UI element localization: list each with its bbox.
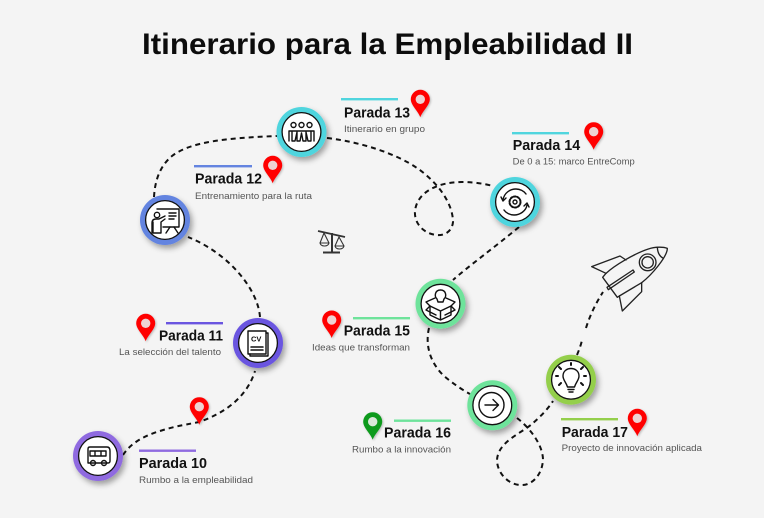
stop: Parada 15: [312, 279, 466, 352]
stop: Parada 11: [119, 314, 283, 368]
title: Itinerario para la Empleabilidad II: [142, 28, 633, 61]
stop: Parada 10: Rumbo a la empleabilidad: [139, 475, 253, 485]
stop: Parada 12: Entrenamiento para la ruta: [195, 191, 313, 201]
stop: Parada 11: La selección del talento: [119, 347, 221, 357]
stop: Parada 15: Ideas que transforman: [312, 342, 410, 352]
stop: Parada 10: Parada 10: [139, 456, 207, 472]
stop: Parada 17: Proyecto de innovación aplicada: [562, 443, 703, 453]
stop: Parada 16: [352, 380, 517, 454]
icon: rocket: [592, 247, 667, 311]
stop: Parada 13: [276, 90, 430, 157]
stop: Parada 11: Parada 11: [159, 328, 223, 344]
stop: Parada 11: CV: [251, 334, 261, 344]
icon: scales: [318, 231, 345, 252]
stop: Parada 13: Itinerario en grupo: [344, 124, 425, 134]
stop: Parada 17: Parada 17: [562, 425, 628, 441]
stop: Parada 12: Parada 12: [195, 172, 262, 188]
stop: Parada 15: Parada 15: [344, 324, 410, 340]
stop: Parada 13: Parada 13: [344, 106, 410, 122]
stop: Parada 14: Parada 14: [513, 138, 580, 154]
stop: Parada 17: [546, 355, 703, 453]
stop: Parada 14: [490, 122, 635, 227]
stop: Parada 10: [73, 397, 253, 485]
dashed route: [123, 136, 603, 485]
stop: Parada 12: [140, 156, 313, 245]
stop: Parada 16: Parada 16: [384, 426, 451, 442]
stop: Parada 14: De 0 a 15: marco EntreComp: [513, 156, 635, 166]
stop: Parada 16: Rumbo a la innovación: [352, 444, 451, 454]
